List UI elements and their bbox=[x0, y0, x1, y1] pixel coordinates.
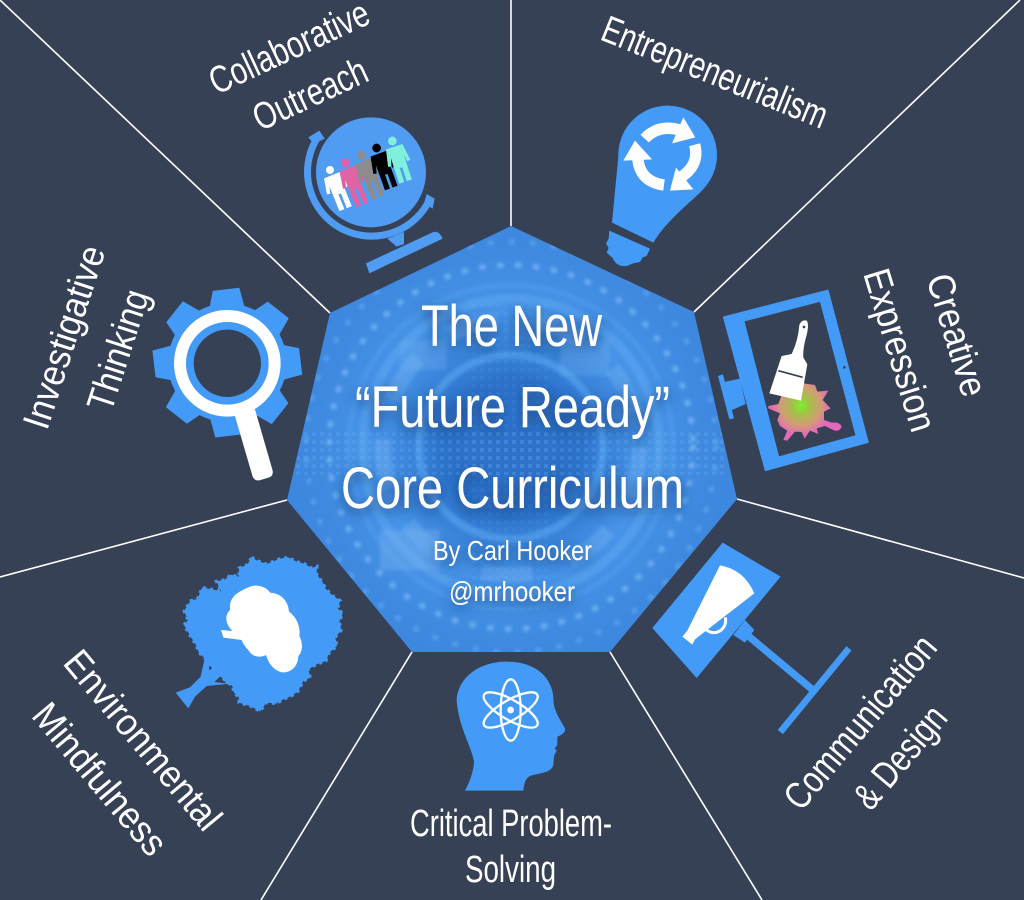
label: critical problem-solving bbox=[410, 803, 612, 891]
label: collaborative outreach: Outreach bbox=[246, 50, 375, 140]
icon: tree with brain bbox=[176, 557, 343, 711]
brain bbox=[221, 586, 302, 672]
central heptagon panel bbox=[280, 220, 745, 660]
icon: megaphone sign bbox=[652, 543, 849, 732]
label: communication & design: Communication bbox=[776, 627, 946, 818]
title bbox=[341, 294, 684, 521]
label: creative expression: Creative bbox=[918, 269, 995, 402]
label: creative expression bbox=[854, 264, 995, 437]
title: The New bbox=[421, 294, 603, 359]
label: collaborative outreach bbox=[203, 0, 376, 140]
icon: head with atom bbox=[457, 662, 565, 791]
label: investigative thinking: Thinking bbox=[80, 284, 158, 416]
label: environmental mindfulness: Environmental bbox=[55, 642, 230, 839]
label: entrepreneurialism: Entrepreneurialism bbox=[595, 9, 834, 137]
paint splat bbox=[768, 383, 842, 441]
label: environmental mindfulness: Mindfulness bbox=[23, 695, 175, 864]
icon: monitor with paint brush bbox=[718, 291, 868, 470]
label: critical problem-solving: Solving bbox=[465, 849, 556, 891]
label: critical problem-solving: Critical Problem- bbox=[410, 803, 612, 845]
brush bbox=[769, 320, 808, 401]
icon: globe with people bbox=[308, 117, 443, 273]
byline: By Carl Hooker bbox=[433, 535, 592, 566]
icon: light bulb with arrows bbox=[606, 106, 717, 266]
label: investigative thinking: Investigative bbox=[16, 240, 114, 434]
icon: gear with magnifying glass bbox=[152, 288, 302, 480]
people bbox=[317, 133, 416, 213]
title: “Future Ready” bbox=[355, 375, 670, 440]
byline: @mrhooker bbox=[449, 576, 575, 607]
label: communication & design: & Design bbox=[845, 697, 956, 818]
byline bbox=[433, 535, 592, 607]
label: creative expression: Expression bbox=[854, 264, 944, 437]
label: investigative thinking bbox=[16, 240, 158, 434]
title: Core Curriculum bbox=[341, 456, 684, 521]
